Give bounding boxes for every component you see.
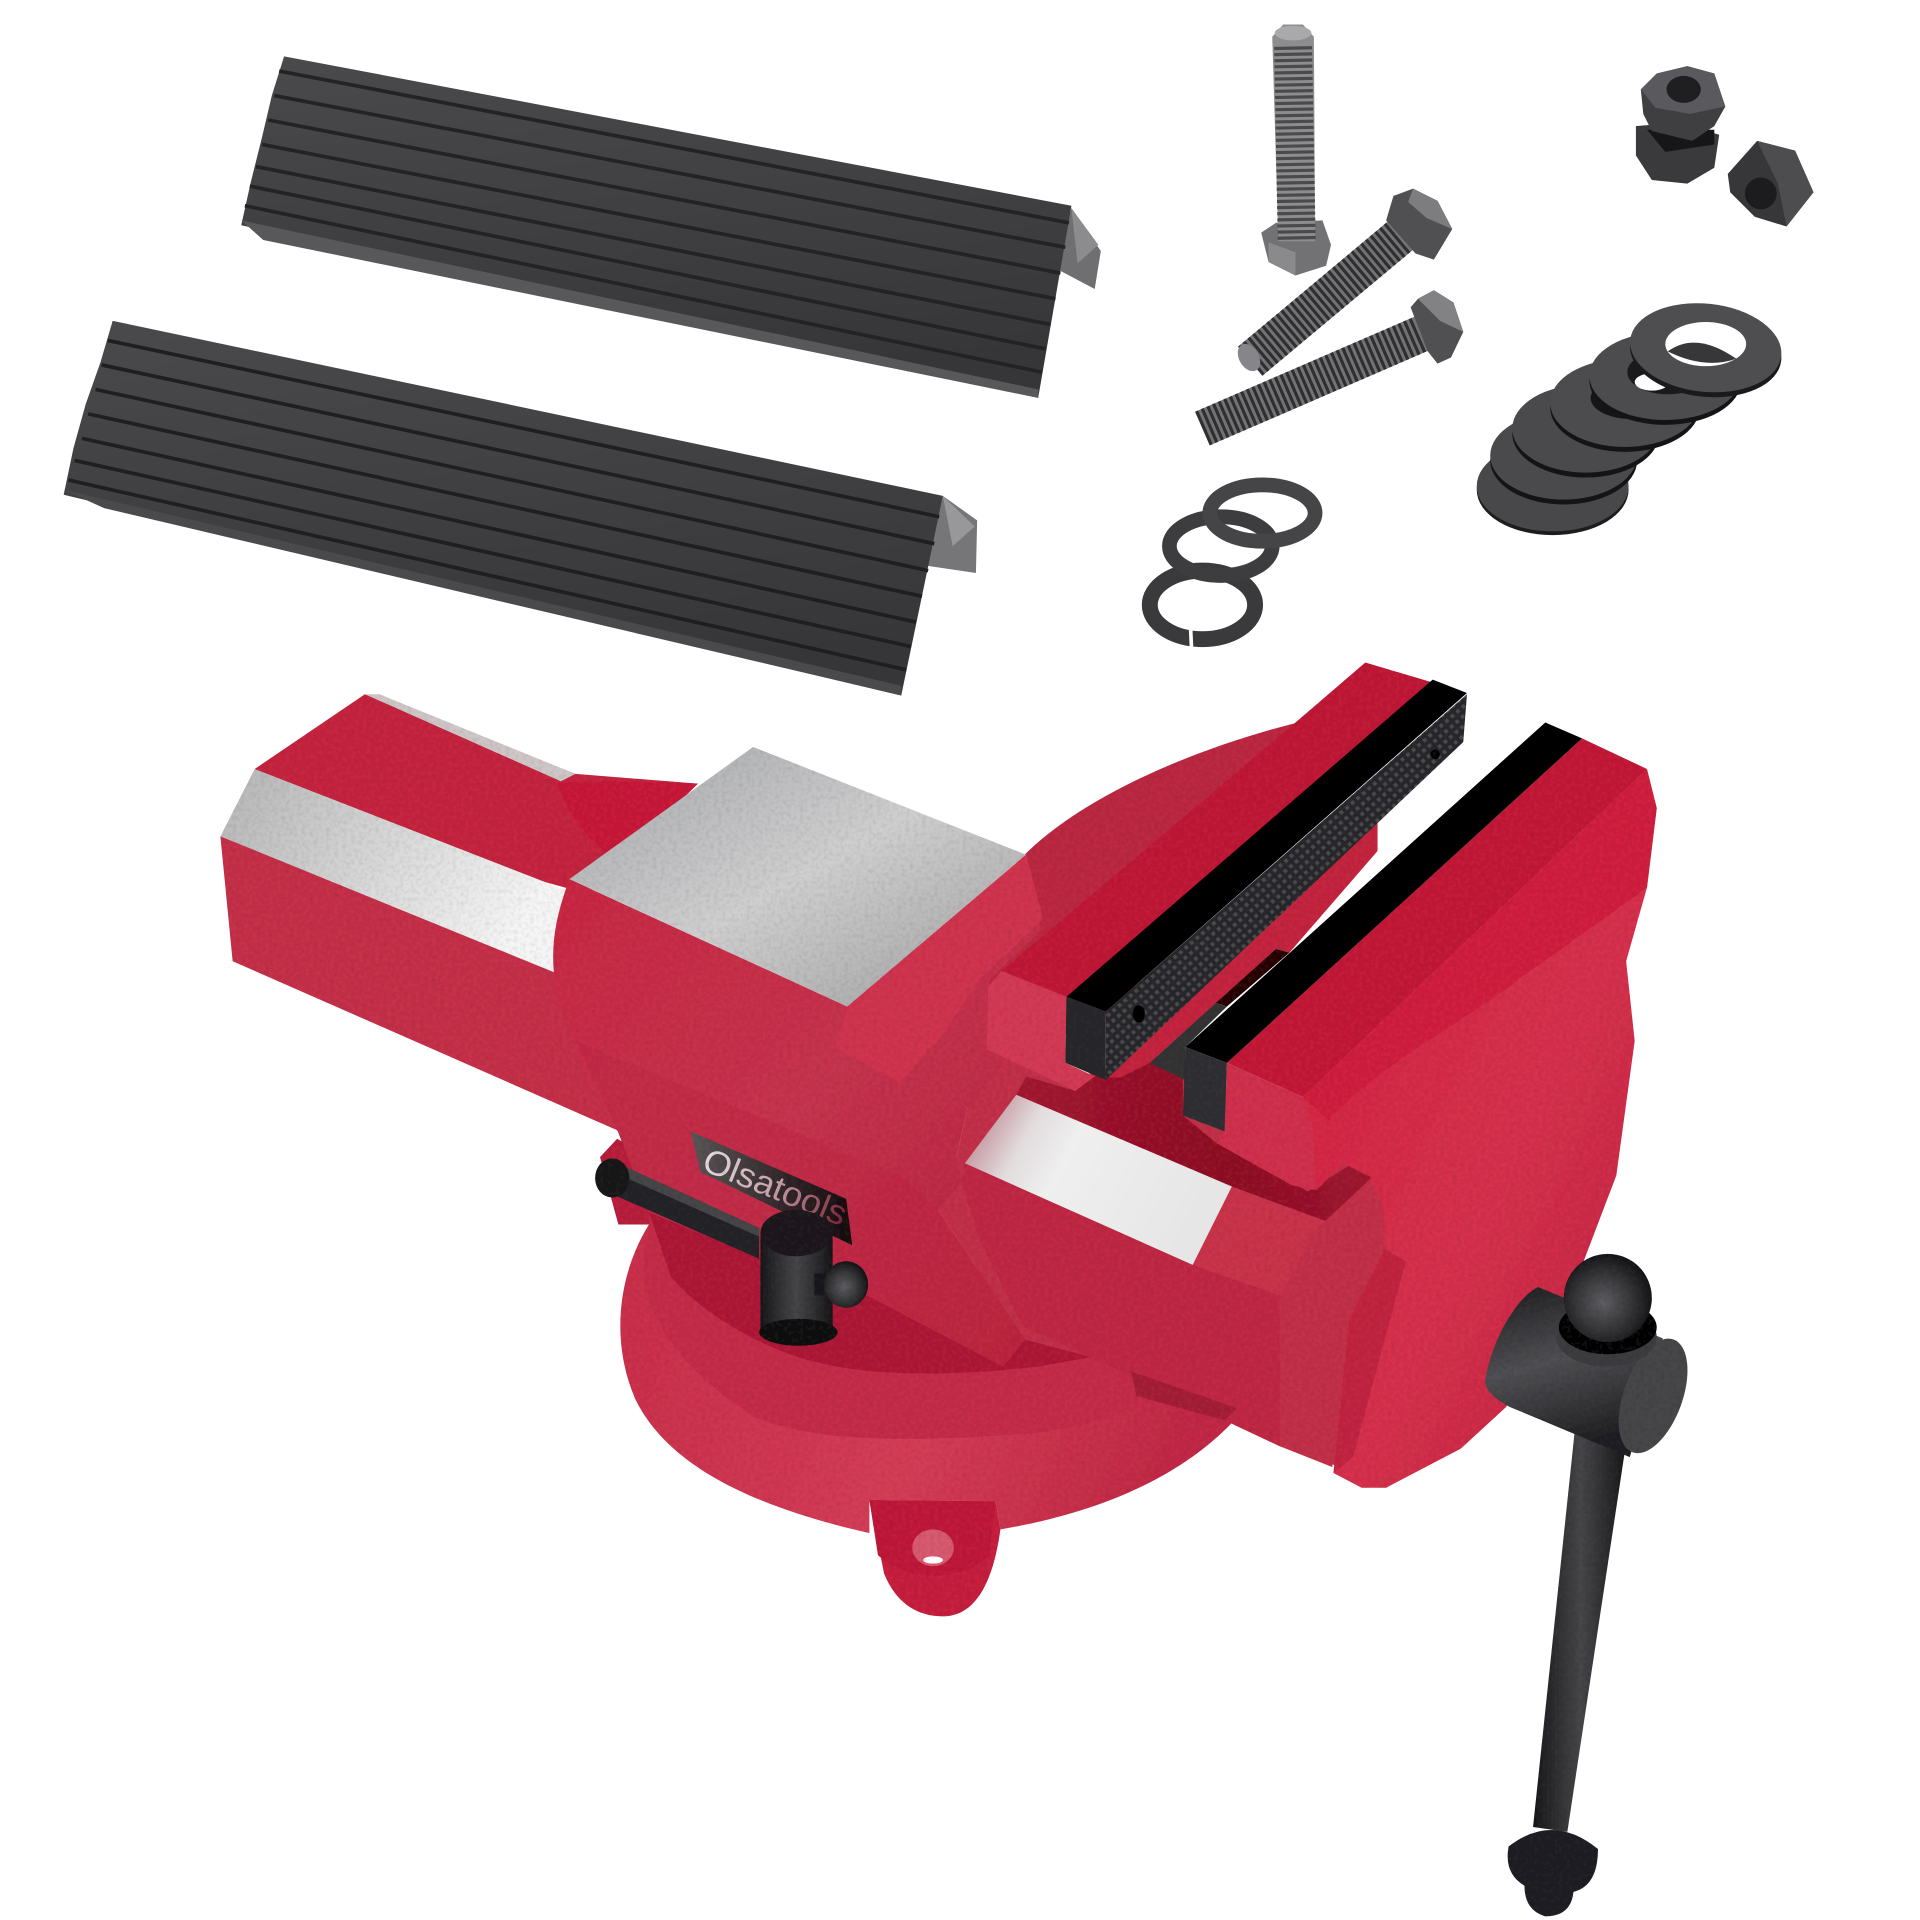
fixed jaw front face	[987, 971, 1095, 1091]
jaw plate, front	[1150, 722, 1582, 1131]
bolt, vertical	[1261, 24, 1331, 276]
lock handle	[595, 1158, 868, 1346]
movable jaw front lip	[1217, 1063, 1316, 1190]
anvil shoulder casting	[835, 855, 1043, 1082]
slide bar bright top	[965, 1095, 1232, 1265]
movable jaw top	[1227, 738, 1647, 1097]
movable jaw upper facet	[1303, 769, 1657, 1120]
vise assembly	[220, 662, 1701, 1916]
brand text: Olsatools	[697, 1142, 852, 1234]
anvil top	[569, 747, 1026, 1007]
slide bar rough end	[1193, 1177, 1373, 1297]
textured jaw plate, rear	[1065, 680, 1467, 1080]
fixed jaw top	[1002, 662, 1435, 997]
movable jaw body	[1303, 769, 1657, 1488]
slide bar shadow	[1131, 1371, 1237, 1420]
rear rail	[220, 694, 698, 1139]
swivel base	[600, 1139, 1232, 1616]
bolt, shallow angle	[1202, 290, 1463, 429]
rubber jaw pad, upper	[241, 56, 1101, 398]
nuts: stacked pair	[1636, 66, 1725, 184]
rear dome of fixed jaw	[980, 722, 1347, 1041]
flat washers stack	[1477, 296, 1786, 535]
slide bar side	[961, 1163, 1283, 1446]
central casting underlay	[938, 1049, 1390, 1469]
fixed body	[553, 855, 1041, 1367]
rubber jaw pad, lower	[64, 321, 977, 696]
body lower facet	[576, 1041, 1025, 1367]
clamp handle	[1485, 1254, 1701, 1916]
swivel base top surface	[649, 1200, 1092, 1374]
mounting lug	[869, 1500, 1000, 1616]
dark gap under jaws	[1016, 1063, 1374, 1224]
swivel base upper band	[643, 1212, 1176, 1439]
red sliver behind jaw plate	[1102, 816, 1378, 1078]
nut: single	[1728, 141, 1813, 227]
brand plate	[691, 1131, 852, 1245]
bolt, angled	[1233, 189, 1452, 375]
movable jaw shading	[1333, 1249, 1406, 1473]
spring washers	[1150, 485, 1315, 647]
